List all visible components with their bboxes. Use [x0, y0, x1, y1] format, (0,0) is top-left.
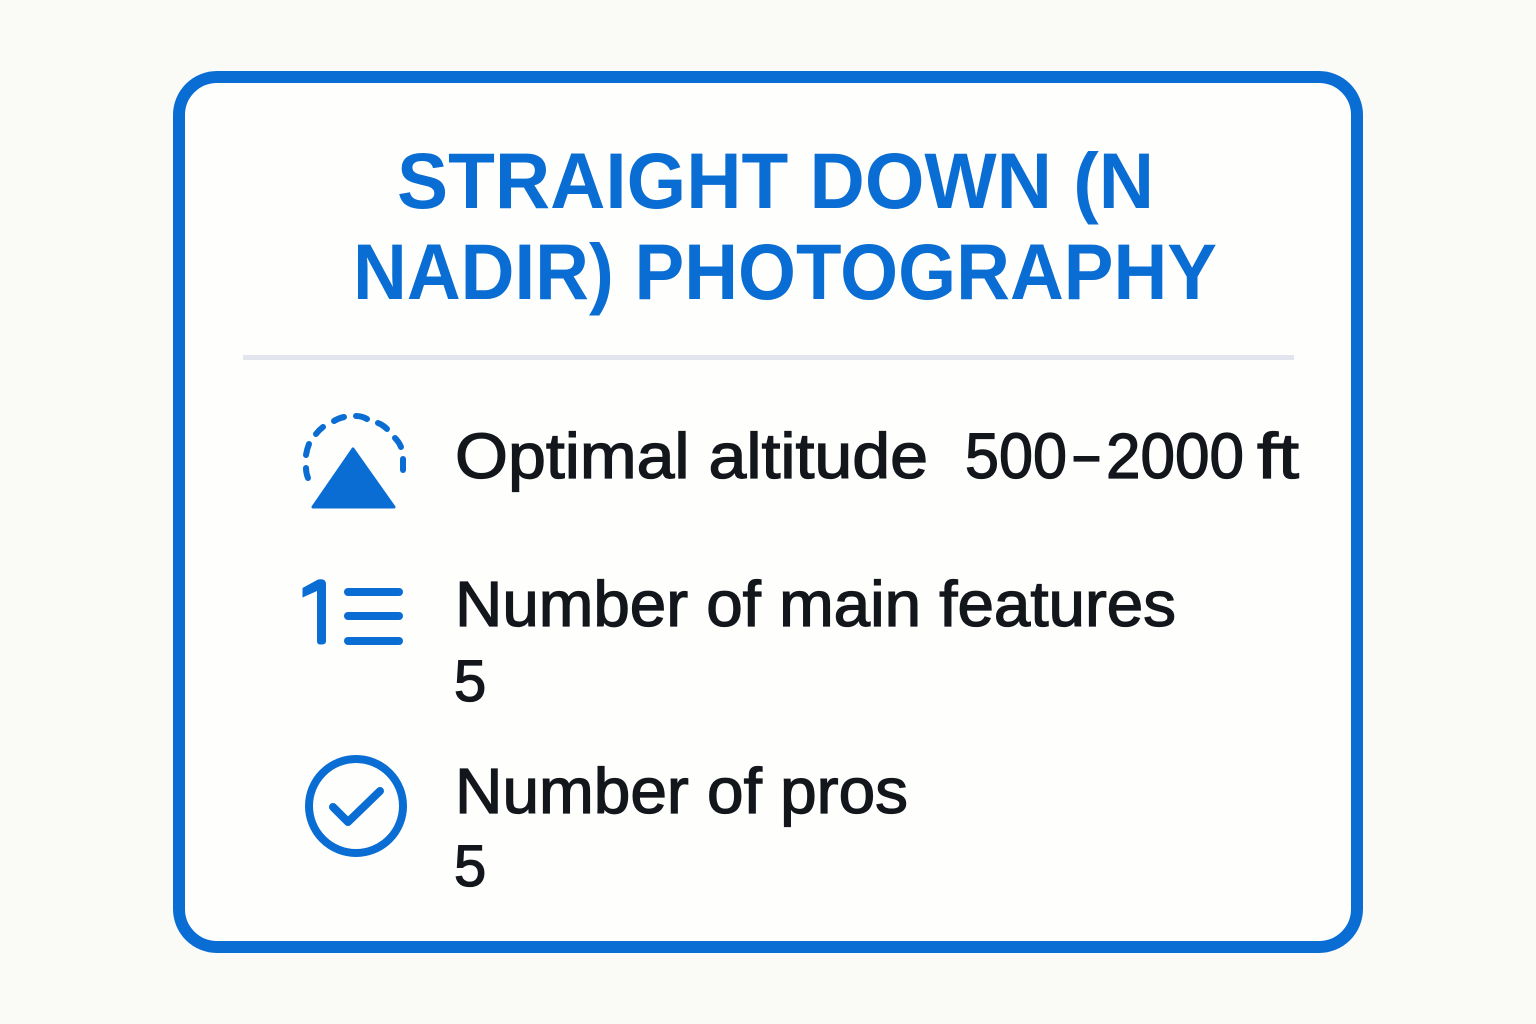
text: optimal altitude: Optimal altitude	[455, 420, 928, 492]
divider	[243, 355, 1294, 360]
text: optimal altitude: –	[1074, 417, 1099, 489]
icon: check circle	[309, 759, 403, 853]
icon: altitude triangle with dashed arc	[306, 416, 403, 507]
text: optimal altitude: 2000	[1106, 420, 1244, 492]
icon: numbered list	[302, 579, 399, 644]
text: number of pros	[454, 755, 908, 899]
text: number of pros: 5	[454, 834, 486, 899]
text: number of main features	[454, 568, 1176, 714]
text: number of pros: Number of pros	[455, 755, 908, 827]
panel: main card	[179, 77, 1357, 947]
text: optimal altitude: 500	[965, 420, 1067, 492]
text: number of main features: Number of main features	[455, 568, 1176, 640]
title	[353, 136, 1217, 316]
text: optimal altitude	[455, 417, 1299, 492]
title: STRAIGHT DOWN (N	[397, 136, 1154, 225]
text: optimal altitude: ft	[1257, 420, 1299, 492]
title: NADIR) PHOTOGRAPHY	[353, 227, 1217, 316]
text: number of main features: 5	[454, 649, 486, 714]
